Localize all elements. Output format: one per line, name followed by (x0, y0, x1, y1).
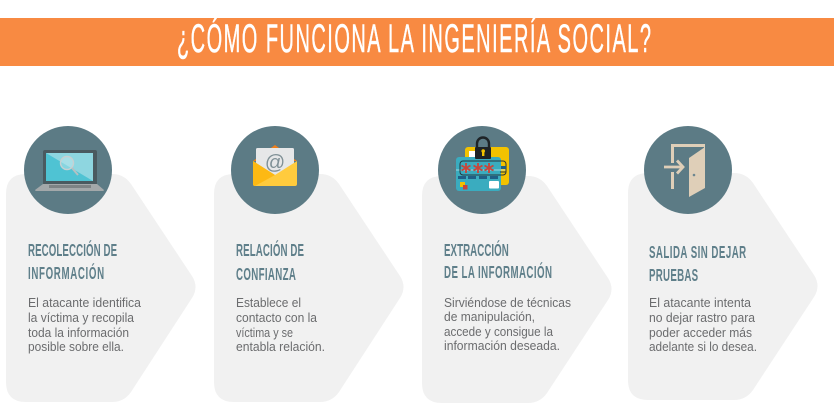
heading 1 (28, 239, 117, 284)
text block 3: accede y consigue la (444, 325, 553, 339)
text block 4 (649, 296, 757, 354)
icon: laptop with magnifier (24, 126, 112, 214)
heading 3 (444, 239, 552, 283)
text block 2: contacto con la (236, 311, 317, 325)
text block 1: posible sobre ella. (28, 340, 124, 354)
text block 4: poder acceder más (649, 326, 752, 340)
card shape 4 (628, 173, 818, 400)
title banner (0, 15, 834, 66)
title banner: ¿CÓMO FUNCIONA LA INGENIERÍA SOCIAL? (177, 15, 651, 61)
text block 4: no dejar rastro para (649, 311, 755, 325)
heading 1: RECOLECCIÓN DE (28, 239, 117, 261)
text block 2: entabla relación. (236, 340, 325, 354)
heading 2 (236, 239, 304, 285)
panel: salida sin dejar pruebas (628, 126, 818, 400)
text block 4: El atacante intenta (649, 296, 751, 310)
text block 3: información deseada. (444, 339, 560, 353)
text block 4: adelante si lo desea. (649, 340, 757, 354)
icon: envelope (231, 126, 319, 214)
panel: extracción de la información (422, 126, 612, 403)
text block 3 (444, 296, 571, 353)
text block 3: Sirviéndose de técnicas (444, 296, 571, 310)
text block 3: de manipulación, (444, 310, 535, 324)
card shape 3 (422, 176, 612, 403)
heading 1: INFORMACIÓN (28, 262, 104, 284)
panel: recolección de información (6, 126, 196, 402)
text block 1: la víctima y recopila (28, 311, 134, 325)
heading 4: SALIDA SIN DEJAR (649, 243, 747, 263)
heading 2: CONFIANZA (236, 265, 296, 285)
text block 2: Establece el (236, 296, 301, 310)
heading 3: EXTRACCIÓN (444, 239, 509, 261)
heading 4: PRUEBAS (649, 266, 698, 286)
card shape 2 (214, 174, 404, 402)
text block 2 (236, 296, 325, 354)
card shape 1 (6, 174, 196, 402)
heading 2: RELACIÓN DE (236, 239, 304, 261)
heading 4 (649, 243, 747, 286)
text block 2: víctima y se (236, 326, 293, 340)
icon: lock and cards (438, 126, 526, 214)
heading 3: DE LA INFORMACIÓN (444, 261, 552, 283)
panel: relación de confianza (214, 126, 404, 402)
text block 1: toda la información (28, 326, 129, 340)
icon: envelope: @ (265, 152, 285, 174)
text block 1: El atacante identifica (28, 296, 141, 310)
text block 1 (28, 296, 141, 354)
icon: door with arrow (644, 126, 732, 214)
